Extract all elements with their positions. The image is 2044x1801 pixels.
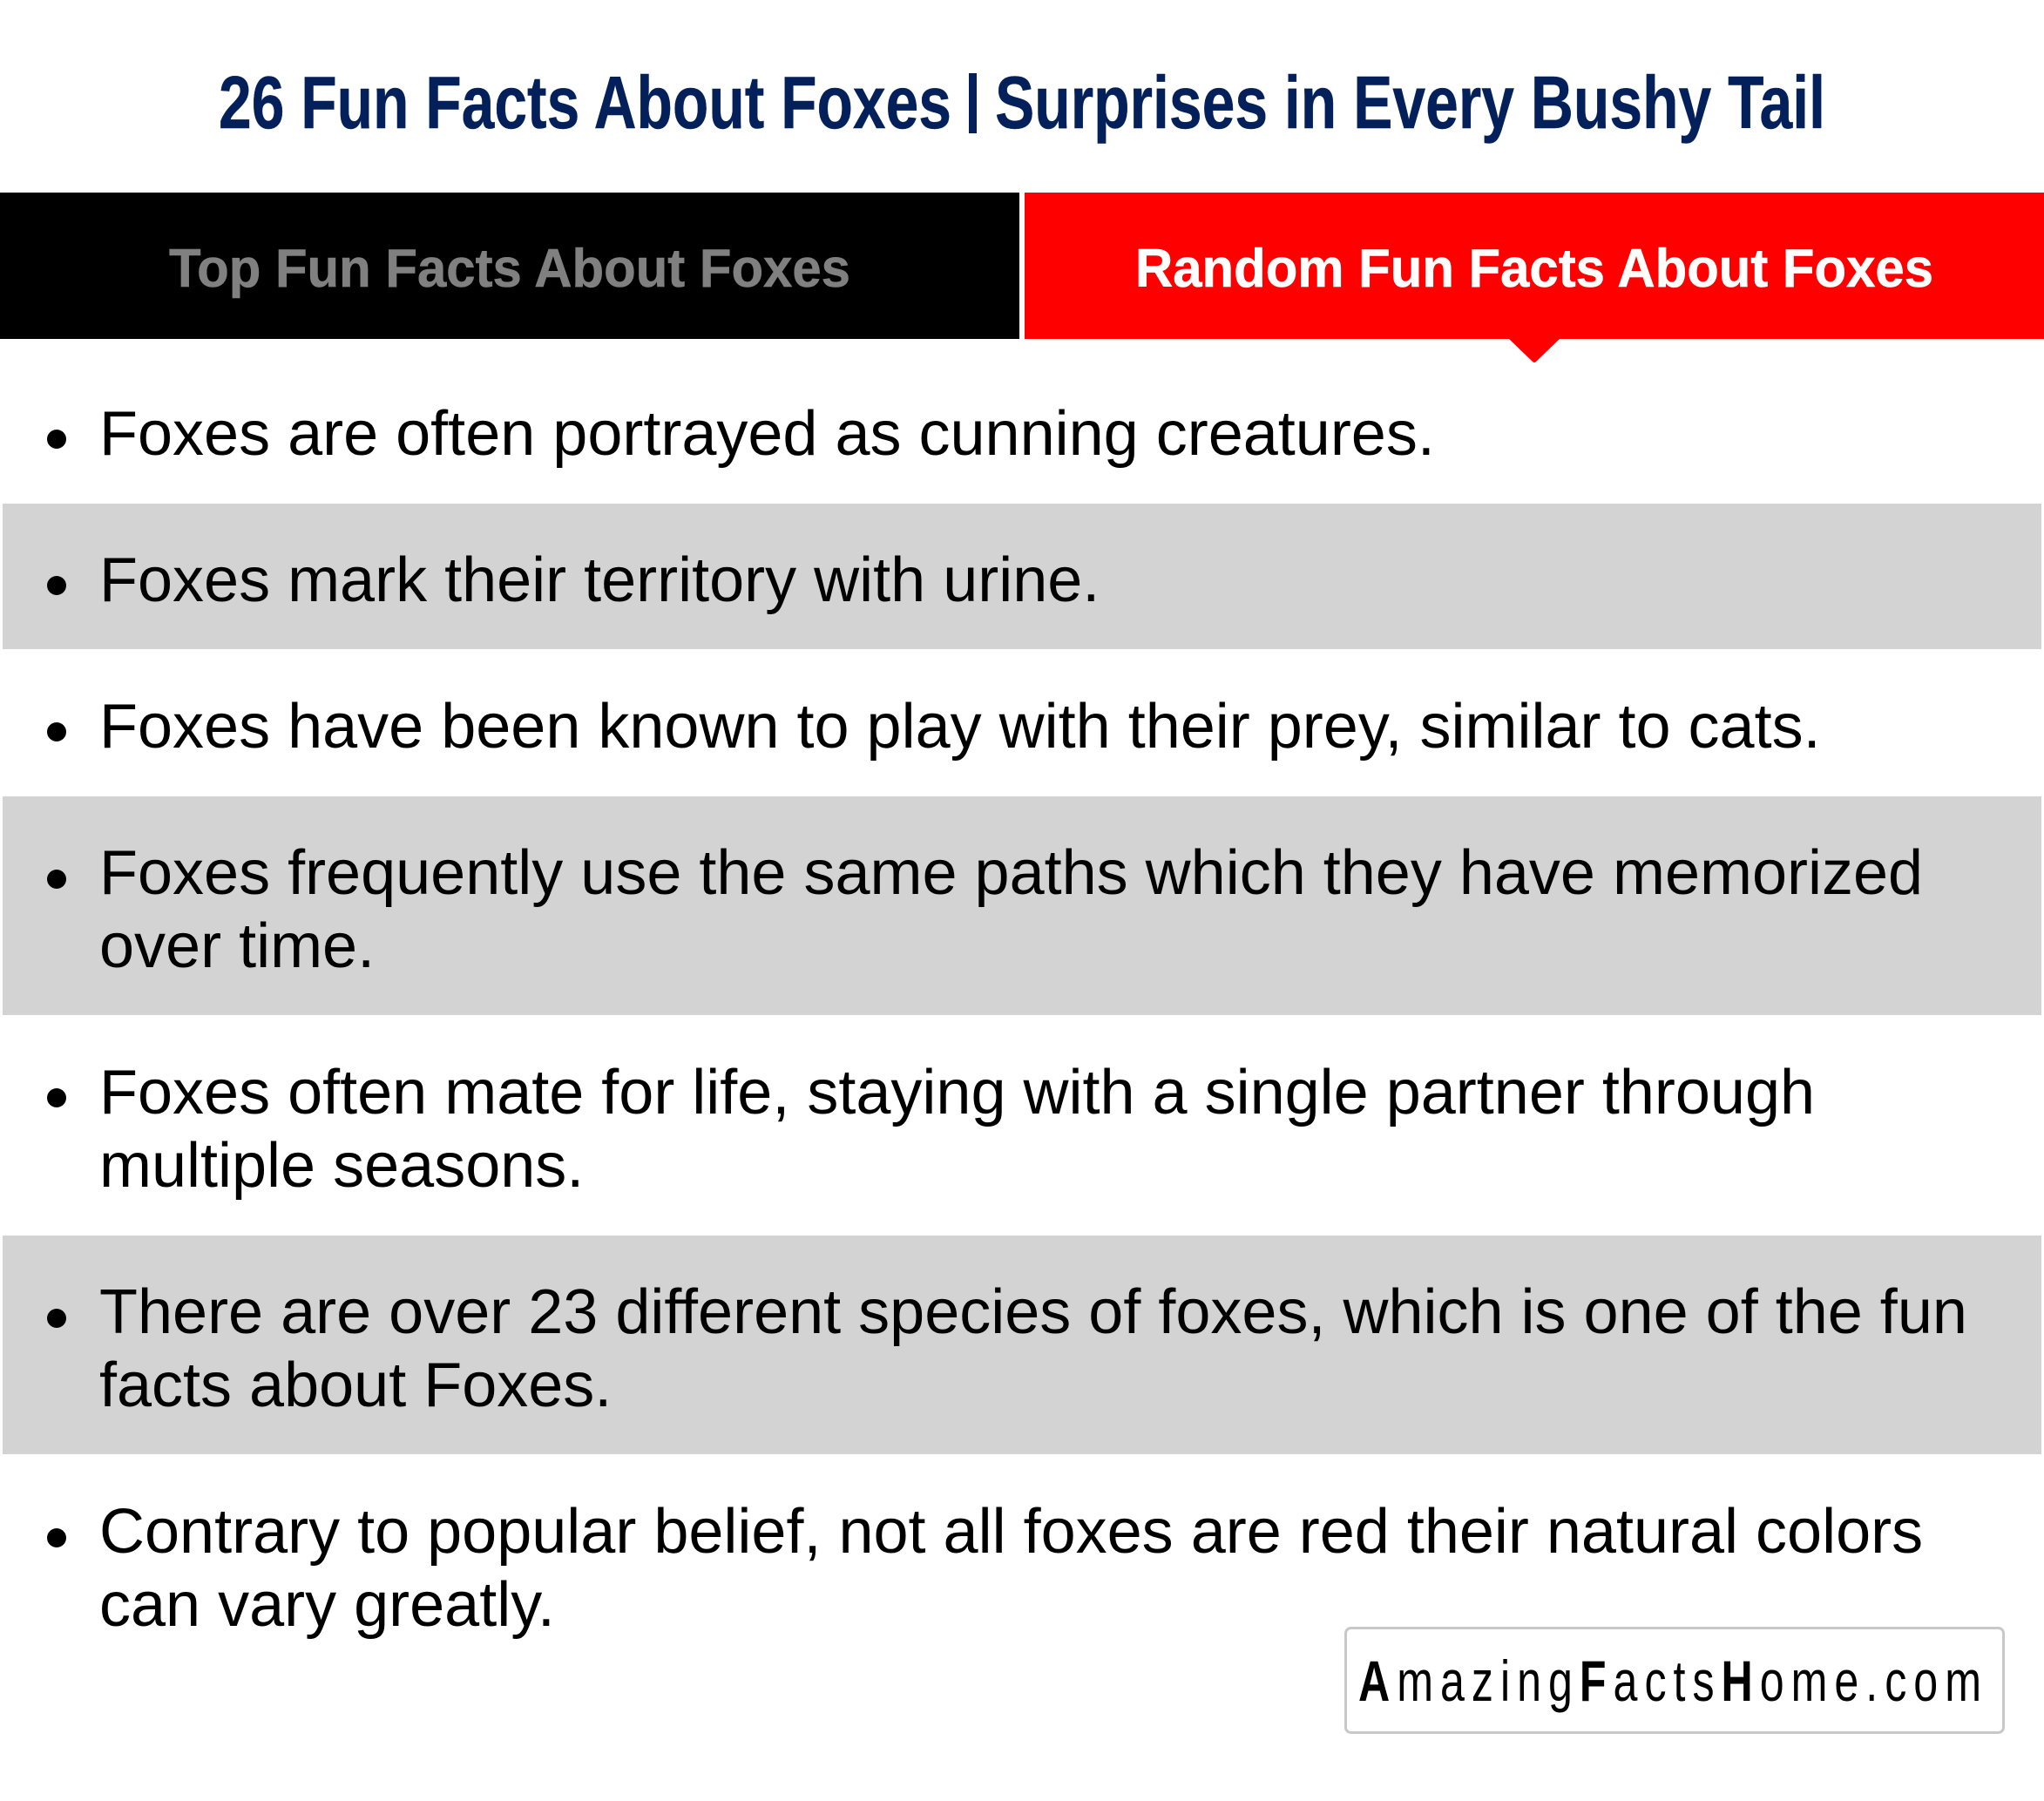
fact 4: over time.: [99, 911, 375, 981]
fact 5: multiple seasons.: [99, 1131, 584, 1201]
fact 1: Foxes are often portrayed as cunning creatures.: [99, 399, 1435, 469]
fact 3: Foxes have been known to play with their prey, similar to cats.: [99, 692, 1821, 762]
fact 4: Foxes frequently use the same paths which they have memorized: [99, 838, 1923, 908]
tab: random fun facts: [1025, 193, 2044, 362]
fact 6: [3, 1236, 2041, 1454]
fact 7: [47, 1497, 1923, 1640]
fact 6: facts about Foxes.: [99, 1351, 612, 1420]
fact 5: Foxes often mate for life, staying with a single partner through: [99, 1058, 1815, 1127]
title: [219, 62, 1825, 145]
fact 7: Contrary to popular belief, not all foxes are red their natural colors: [99, 1497, 1923, 1567]
tab: random fun facts: Random Fun Facts About Foxes: [1135, 239, 1933, 299]
tab: top fun facts: [0, 193, 1019, 339]
watermark: AmazingFactsHome.com: [1358, 1649, 1988, 1713]
watermark: [1345, 1628, 2004, 1732]
title: Surprises in Every Bushy Tail: [995, 62, 1825, 145]
fact 2: Foxes mark their territory with urine.: [99, 545, 1100, 615]
fact 4: [3, 796, 2041, 1015]
fact 7: can vary greatly.: [99, 1570, 555, 1640]
fact 5: [47, 1058, 1815, 1201]
fact 2: [3, 504, 2041, 649]
title: 26 Fun Facts About Foxes: [219, 62, 951, 145]
tab: top fun facts: Top Fun Facts About Foxes: [169, 239, 850, 299]
fact 6: There are over 23 different species of foxes, which is one of the fun: [99, 1277, 1967, 1347]
